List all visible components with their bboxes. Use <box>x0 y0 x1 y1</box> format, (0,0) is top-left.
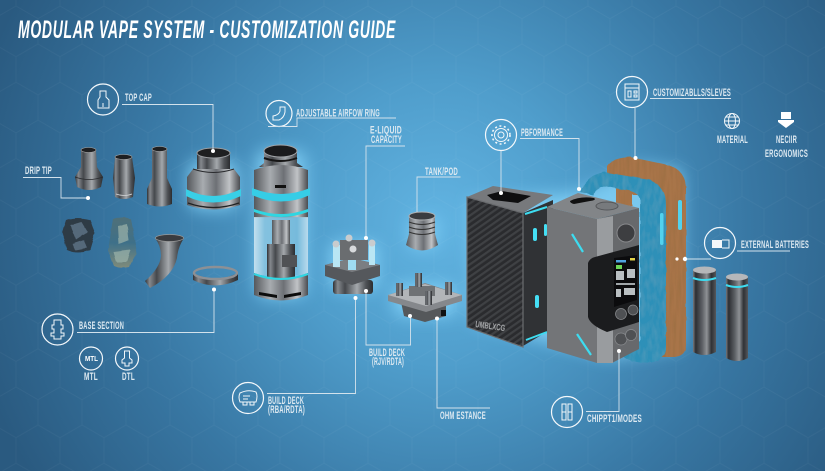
top cap <box>186 148 241 210</box>
callout: build deck RJV/RDTA: BUILD DECK <box>369 347 405 359</box>
airflow cyan ring <box>252 188 310 202</box>
callout: drip tip <box>23 165 90 200</box>
feature: material: MATERIAL <box>717 134 748 146</box>
callout: build deck RJV/RDTA <box>364 289 412 368</box>
mod body <box>547 193 639 363</box>
callout: e-liquid capacity <box>364 124 405 240</box>
callout: e-liquid capacity: CAPACITY <box>371 134 402 146</box>
callout: build deck RBA/RDTA: BUILD DECK <box>268 395 304 407</box>
base ring <box>193 267 238 286</box>
part glows <box>188 150 682 358</box>
callout: adjustable airflow ring <box>266 100 396 126</box>
callout: adjustable airflow ring: ADJUSTABLE AIRFOW RING <box>296 108 380 120</box>
feature: ergonomics: NECIIR <box>776 134 797 146</box>
control panel <box>588 245 639 332</box>
feature: ergonomics <box>765 112 808 160</box>
callout: build deck RBA/RDTA <box>232 296 358 416</box>
callout: base section <box>42 288 216 345</box>
build deck RBA <box>325 234 380 294</box>
battery 1 <box>693 266 716 355</box>
callout: ohm resistance <box>435 316 490 422</box>
drip tip 5: translucent <box>108 218 137 268</box>
callout: tank/pod <box>417 166 460 212</box>
batteries <box>693 266 748 361</box>
callout: drip tip: DRIP TIP <box>25 165 52 177</box>
drip tip 1 <box>75 148 103 190</box>
buttons <box>615 305 638 345</box>
drip tip 2 <box>113 154 135 199</box>
tank/pod adapter <box>406 212 438 250</box>
glass section <box>254 217 308 275</box>
callout: customizable sleeves: CUSTOMIZABLLS/SLEVES <box>653 87 731 99</box>
callout: performance: PBFORMANCE <box>521 127 563 139</box>
callout: top cap <box>88 84 215 153</box>
option: DTL: DTL <box>122 371 135 383</box>
tank collar <box>254 165 308 218</box>
group: drip tips <box>62 146 184 288</box>
callout: external batteries <box>675 228 809 261</box>
mod right face <box>597 208 639 363</box>
blue sleeve <box>580 172 666 363</box>
drip tip 6: curved <box>145 234 184 288</box>
battery 2 <box>726 274 748 361</box>
callout: customizable sleeves <box>616 76 731 160</box>
tank top neck <box>259 150 303 167</box>
option: DTL <box>116 347 138 383</box>
feature: material <box>717 114 748 146</box>
callout: ohm resistance: OHM ESTANCE <box>440 410 486 422</box>
callout: top cap: TOP CAP <box>125 92 152 104</box>
callout: base section: BASE SECTION <box>79 320 124 332</box>
callout: chipset/modes <box>552 349 642 428</box>
callout: chipset/modes: CHIPPT1/MODES <box>587 413 642 425</box>
callout: e-liquid capacity: E-LIQUID <box>370 124 402 136</box>
sleeve cyan slots <box>660 200 682 245</box>
callout: performance <box>486 120 581 195</box>
option: MTL <box>80 347 102 383</box>
callout: build deck RJV/RDTA: (RJV/RDTA) <box>372 356 404 368</box>
tank base <box>254 273 308 300</box>
mod left face <box>547 207 597 363</box>
title: MODULAR VAPE SYSTEM - CUSTOMIZATION GUIDE <box>18 16 396 44</box>
tank assembly <box>252 145 310 300</box>
drip tip 3 <box>147 146 172 206</box>
option: MTL: MTL <box>84 371 98 383</box>
brown sleeve <box>607 157 686 357</box>
carbon shell brand: UMBLXCG <box>475 319 506 333</box>
drip tip 4: dark stone <box>62 218 95 252</box>
callout: build deck RBA/RDTA: (RBA/RDTA) <box>268 404 305 416</box>
build deck RTA <box>388 273 462 322</box>
screen <box>614 255 637 307</box>
option: MTL: MTL <box>85 354 98 363</box>
mod top <box>547 193 639 219</box>
callout: tank/pod: TANK/POD <box>425 166 458 178</box>
carbon shell <box>467 186 553 347</box>
